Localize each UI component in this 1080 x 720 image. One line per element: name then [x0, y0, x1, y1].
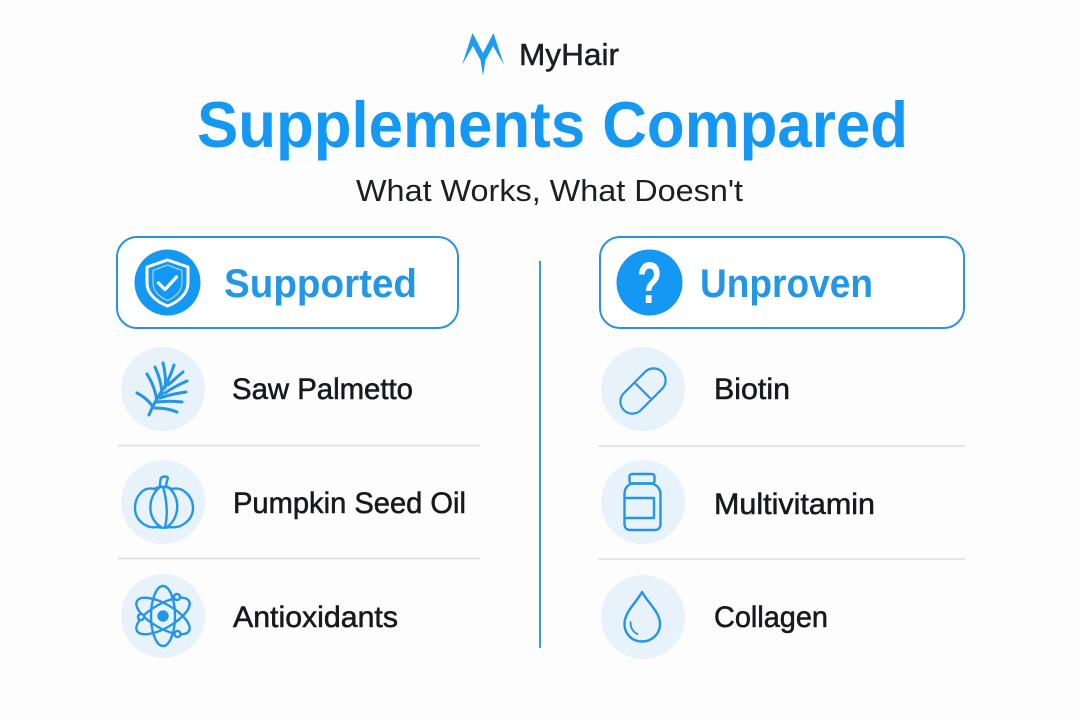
- icon: atom: [131, 586, 195, 646]
- item: pumpkin seed oil: [121, 460, 466, 544]
- center divider: [539, 261, 541, 648]
- label: Pumpkin Seed Oil: [233, 487, 466, 520]
- label: Collagen: [714, 601, 828, 634]
- unproven heading: Unproven: [700, 262, 873, 306]
- panel: supported: [117, 237, 480, 658]
- label: Multivitamin: [714, 488, 875, 521]
- label: Biotin: [714, 373, 790, 406]
- panel: unproven: [598, 237, 965, 659]
- icon: bottle: [624, 474, 660, 530]
- item: multivitamin: [601, 460, 875, 544]
- icon: question mark: [616, 250, 682, 316]
- label: Antioxidants: [233, 601, 398, 634]
- unproven header: [600, 237, 964, 328]
- item: saw palmetto: [121, 347, 413, 431]
- icon: water drop: [624, 592, 660, 642]
- label: Saw Palmetto: [232, 373, 413, 406]
- item: biotin: [601, 347, 790, 431]
- icon: capsule: [615, 363, 671, 419]
- subtitle: What Works, What Doesn't: [356, 173, 743, 208]
- icon: logo mark: [462, 33, 504, 76]
- supported heading: Supported: [224, 262, 417, 306]
- title: Supplements Compared: [197, 88, 908, 161]
- icon: question mark: ?: [637, 251, 662, 316]
- icon: shield with check: [134, 250, 200, 316]
- item: collagen: [601, 575, 828, 659]
- icon: palm leaf: [137, 363, 187, 415]
- icon: pumpkin: [135, 476, 193, 528]
- logo: MyHair: [462, 33, 619, 76]
- item: antioxidants: [121, 574, 398, 658]
- logo wordmark: MyHair: [519, 37, 619, 72]
- supported header: [117, 237, 458, 328]
